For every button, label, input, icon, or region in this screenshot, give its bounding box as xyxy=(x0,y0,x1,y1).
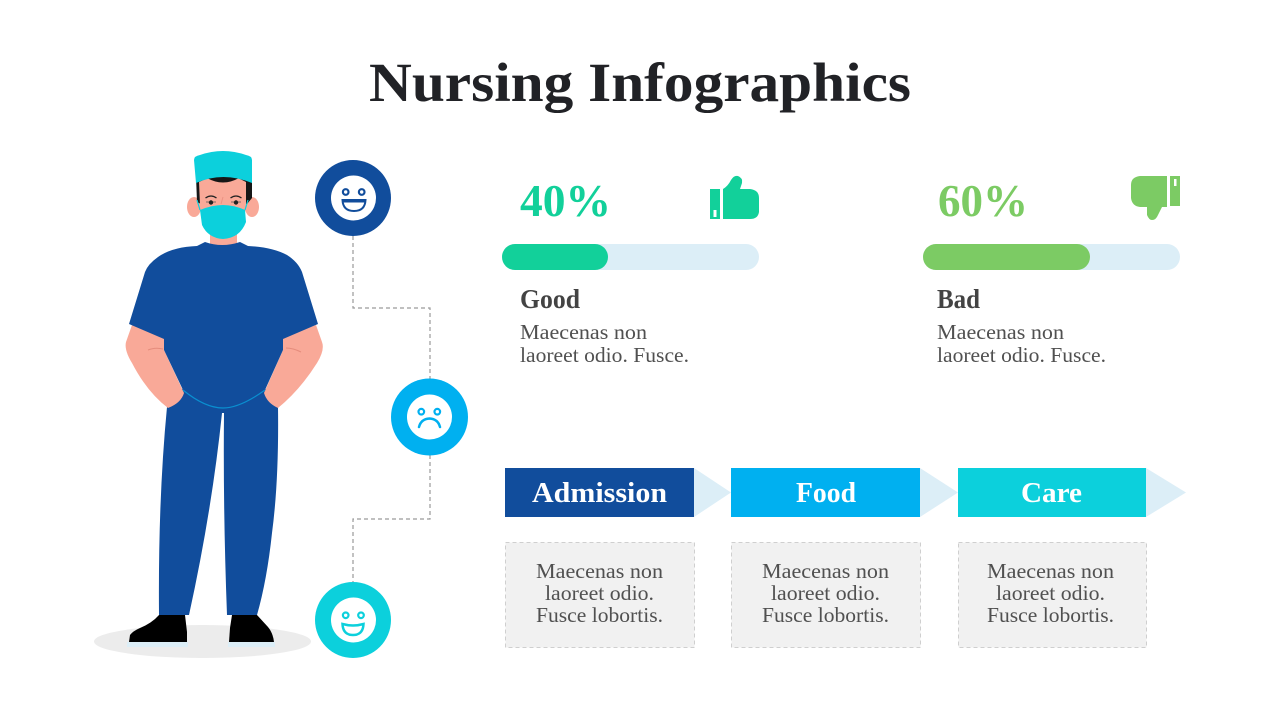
face mask xyxy=(197,200,248,239)
good heading: Good xyxy=(520,284,580,314)
right arm xyxy=(264,325,323,408)
admission header xyxy=(505,468,694,517)
good description: laoreet odio. Fusce. xyxy=(520,343,689,367)
admission description xyxy=(536,559,664,627)
icon: thumbs down xyxy=(1131,176,1180,220)
bad percentage: 60% xyxy=(938,175,1028,226)
panel: care xyxy=(958,468,1186,648)
care header xyxy=(958,468,1146,517)
trousers xyxy=(159,388,278,615)
bad description: laoreet odio. Fusce. xyxy=(937,343,1106,367)
shirt hem line xyxy=(183,390,265,408)
floor shadow xyxy=(94,625,311,658)
good description xyxy=(520,320,689,367)
icon: thumbs up xyxy=(710,176,759,219)
panel: good xyxy=(502,175,759,367)
dashed connectors xyxy=(353,236,430,582)
elbow creases xyxy=(148,348,301,352)
food description: Maecenas non xyxy=(762,559,890,583)
arrow: care xyxy=(1146,468,1186,517)
admission description: laoreet odio. xyxy=(545,581,654,605)
bad progress bar xyxy=(923,244,1180,270)
care label: Care xyxy=(1021,478,1082,509)
icon: sad face light blue xyxy=(391,378,468,456)
panel: bad xyxy=(923,175,1180,367)
food text box xyxy=(732,542,920,648)
scrub shirt xyxy=(129,242,318,408)
food header xyxy=(731,468,920,517)
care text box xyxy=(958,542,1146,648)
neck xyxy=(210,232,237,246)
title: Nursing Infographics xyxy=(369,52,911,113)
food label: Food xyxy=(796,478,856,509)
food description: Fusce lobortis. xyxy=(762,603,889,627)
care description: laoreet odio. xyxy=(996,581,1105,605)
good percentage: 40% xyxy=(520,175,611,226)
arrow: food xyxy=(920,468,958,517)
admission description: Maecenas non xyxy=(536,559,664,583)
admission label: Admission xyxy=(532,478,667,509)
icon: happy face dark blue xyxy=(315,160,391,236)
care description: Maecenas non xyxy=(987,559,1115,583)
shoes xyxy=(127,615,275,647)
left arm xyxy=(126,325,184,408)
food description xyxy=(762,559,890,627)
arrow: admission xyxy=(694,468,731,517)
panel: food xyxy=(731,468,958,648)
illustration: nurse figure xyxy=(94,151,323,658)
icon: happy face teal xyxy=(315,582,391,658)
bad heading: Bad xyxy=(937,284,980,314)
care description xyxy=(987,559,1115,627)
admission description: Fusce lobortis. xyxy=(536,603,663,627)
admission text box xyxy=(506,542,694,648)
surgical cap xyxy=(194,151,252,183)
bad description: Maecenas non xyxy=(937,320,1065,344)
good description: Maecenas non xyxy=(520,320,648,344)
care description: Fusce lobortis. xyxy=(987,603,1114,627)
head xyxy=(187,176,259,225)
bad description xyxy=(937,320,1106,367)
food description: laoreet odio. xyxy=(771,581,880,605)
panel: admission xyxy=(505,468,731,648)
good progress bar xyxy=(502,244,759,270)
